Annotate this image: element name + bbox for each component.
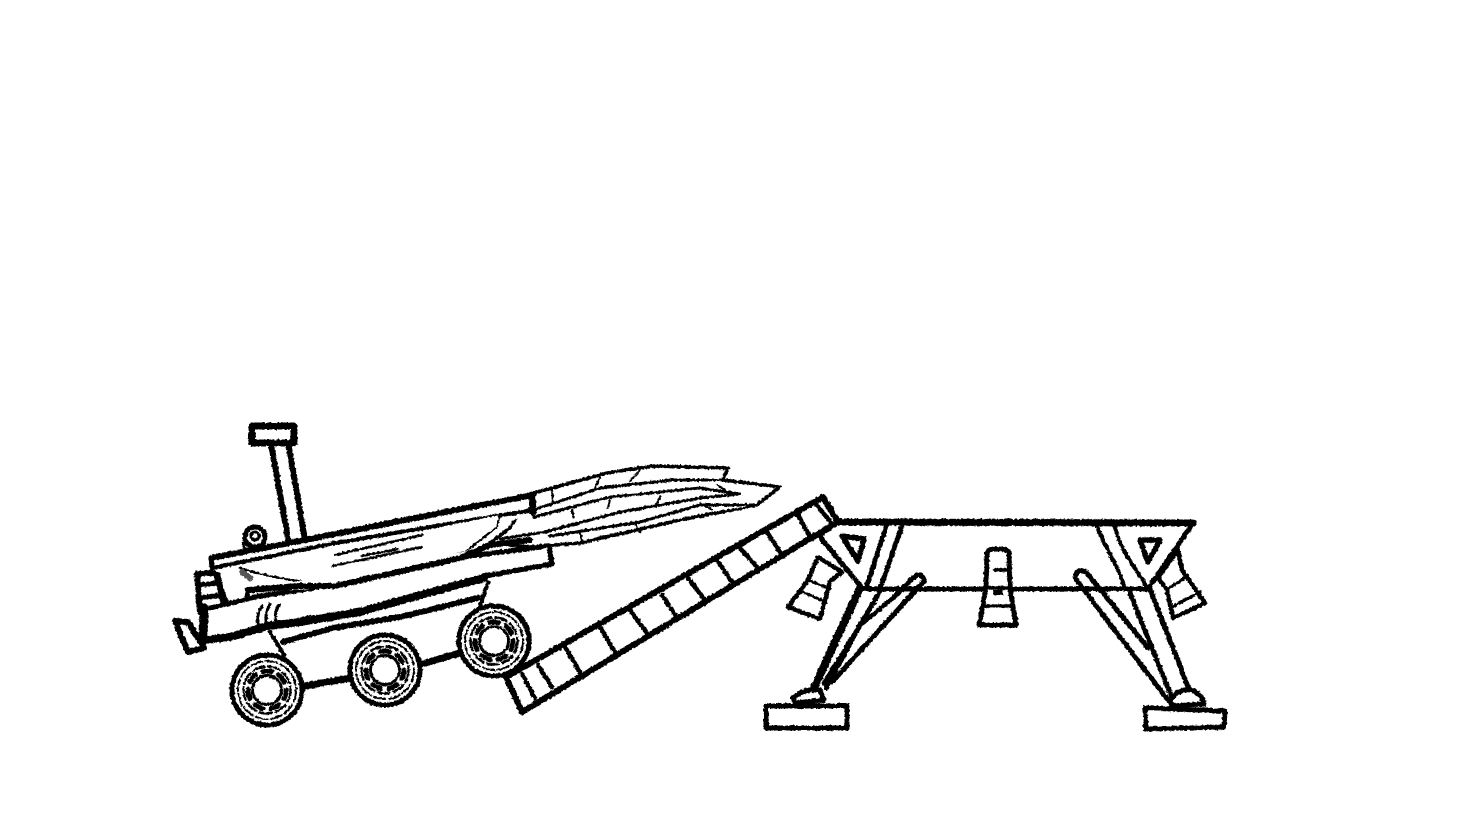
lander: left triangle bracket <box>842 536 864 561</box>
rover: front wheel <box>459 606 529 676</box>
lander: left rear nozzle <box>788 557 842 619</box>
rover: camera <box>243 527 265 552</box>
lander: right leg <box>1075 571 1204 706</box>
ramp <box>506 497 838 712</box>
rover: rear boxes <box>197 566 263 612</box>
lander: centre nozzle <box>979 549 1016 625</box>
lander: left foot pad <box>766 706 847 728</box>
rover: mid deck <box>203 546 552 642</box>
lander: right triangle bracket <box>1140 540 1160 562</box>
rover: middle wheel <box>350 635 420 705</box>
lander <box>766 522 1225 729</box>
lander: body <box>820 522 1193 589</box>
rover: lower body <box>270 582 488 686</box>
rover: solar wings <box>490 466 780 547</box>
lander: left leg <box>793 575 924 703</box>
rover: mast <box>252 426 305 544</box>
lander: right rear nozzle <box>1158 550 1205 618</box>
lander: right foot pad <box>1145 708 1225 729</box>
rover: rear hook <box>175 621 204 652</box>
rover: rear wheel <box>232 655 302 725</box>
rover <box>175 426 780 725</box>
rover: top panel <box>210 495 533 598</box>
